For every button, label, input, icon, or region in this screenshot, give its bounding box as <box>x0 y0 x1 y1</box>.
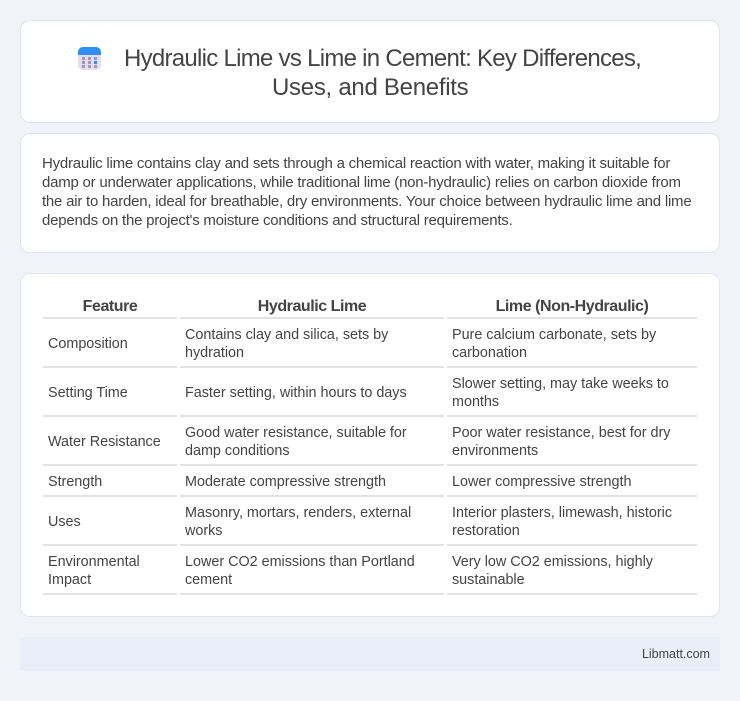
row: strength: Strength <box>48 474 102 490</box>
row: water resistance <box>43 425 697 466</box>
row: environmental impact <box>43 554 697 595</box>
title <box>124 45 641 101</box>
row: setting time: Faster setting, within hours to days <box>185 385 407 401</box>
row: uses <box>43 505 697 546</box>
row: composition: Contains clay and silica, sets by <box>185 327 388 343</box>
title: Hydraulic Lime vs Lime in Cement: Key Differences, <box>124 45 641 72</box>
row: composition: carbonation <box>452 345 527 361</box>
row: environmental impact: Lower CO2 emissions than Portland <box>185 554 415 570</box>
row: water resistance: damp conditions <box>185 443 290 459</box>
row: water resistance: Water Resistance <box>48 434 161 450</box>
text: intro: Hydraulic lime contains clay and sets through a chemical reaction with water, making it suitable for <box>42 155 670 172</box>
row: setting time: Slower setting, may take weeks to <box>452 376 669 392</box>
row: uses: Uses <box>48 514 81 530</box>
table header: Feature <box>83 298 137 315</box>
icon: calendar <box>78 47 101 70</box>
row: composition: Composition <box>48 336 128 352</box>
panel: header <box>20 20 720 123</box>
row: setting time: Setting Time <box>48 385 128 401</box>
table header: Hydraulic Lime <box>258 298 366 315</box>
panel: comparison table <box>20 273 720 617</box>
row: composition <box>43 327 697 368</box>
panel: intro paragraph <box>20 133 720 253</box>
row: environmental impact: cement <box>185 572 232 588</box>
text: intro: damp or underwater applications, while traditional lime (non-hydraulic) relies on carbon dioxide from <box>42 174 681 191</box>
text: intro: depends on the project's moisture conditions and structural requirements. <box>42 212 513 229</box>
row: water resistance: Poor water resistance, best for dry <box>452 425 670 441</box>
row: strength: Moderate compressive strength <box>185 474 386 490</box>
row: strength: Lower compressive strength <box>452 474 631 490</box>
row: strength <box>43 474 697 497</box>
row: composition: hydration <box>185 345 244 361</box>
row: uses: restoration <box>452 523 520 539</box>
footer <box>20 637 720 671</box>
row: uses: works <box>185 523 222 539</box>
row: water resistance: environments <box>452 443 538 459</box>
row: uses: Masonry, mortars, renders, external <box>185 505 411 521</box>
table header: Lime (Non-Hydraulic) <box>496 298 648 315</box>
row: composition: Pure calcium carbonate, sets by <box>452 327 656 343</box>
row: environmental impact: Impact <box>48 572 91 588</box>
row: environmental impact: Environmental <box>48 554 140 570</box>
title: Uses, and Benefits <box>272 74 468 101</box>
row: environmental impact: sustainable <box>452 572 525 588</box>
table header <box>43 298 697 319</box>
row: uses: Interior plasters, limewash, historic <box>452 505 672 521</box>
text: intro <box>42 155 692 229</box>
text: intro: the air to harden, ideal for breathable, dry environments. Your choice between hydraulic lime and lime <box>42 193 691 210</box>
row: setting time: months <box>452 394 499 410</box>
row: setting time <box>43 376 697 417</box>
row: environmental impact: Very low CO2 emissions, highly <box>452 554 653 570</box>
row: water resistance: Good water resistance, suitable for <box>185 425 407 441</box>
footer text: Libmatt.com <box>642 647 710 661</box>
